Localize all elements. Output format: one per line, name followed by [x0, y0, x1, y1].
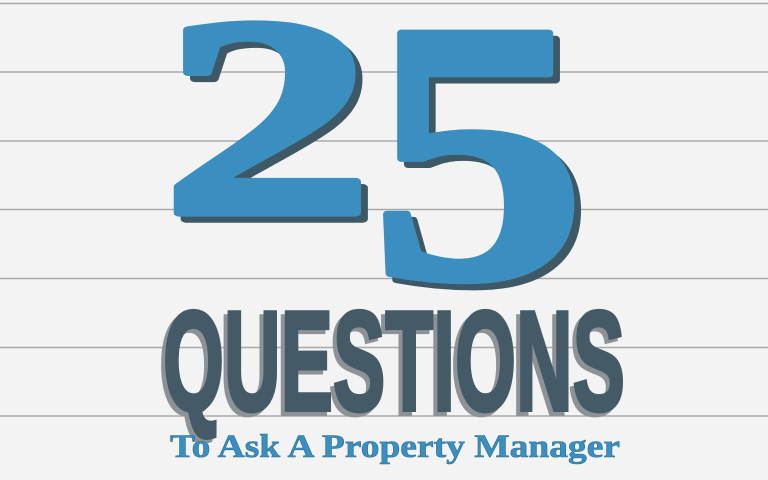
- subtitle: To Ask A Property Manager: [170, 429, 620, 465]
- title number: 25: [161, 0, 593, 364]
